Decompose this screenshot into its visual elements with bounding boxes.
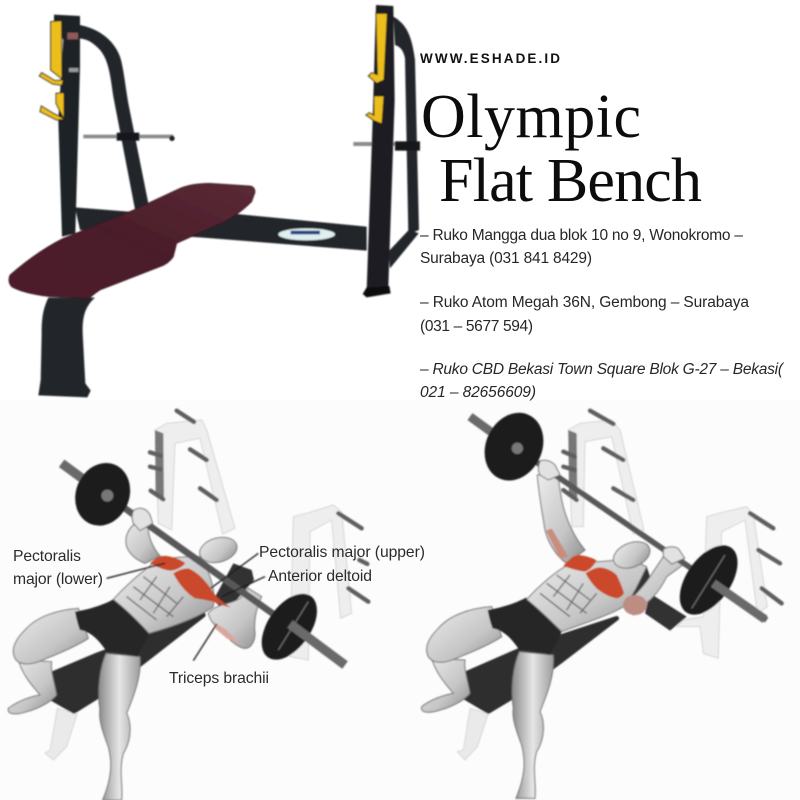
muscle labels: Pectoralis [13, 548, 81, 565]
address block: – Ruko Mangga dua blok 10 no 9, Wonokromo – [420, 227, 743, 244]
rear rack [563, 411, 644, 534]
pectoralis highlight [563, 555, 624, 598]
torso [527, 559, 647, 632]
muscle labels: Pectoralis major (upper) [259, 544, 425, 561]
address block: – Ruko CBD Bekasi Town Square Blok G-27 – Bekasi( [419, 361, 785, 378]
address block: 021 – 82656609) [420, 384, 536, 401]
address block: (031 – 5677 594) [420, 318, 533, 335]
bench pad [455, 567, 687, 760]
rear frame arch right [393, 17, 419, 234]
torso [113, 557, 214, 633]
head [610, 537, 654, 573]
photo: olympic flat bench [9, 5, 420, 397]
deltoid highlight [623, 595, 647, 615]
hand left [132, 508, 153, 531]
barbell [62, 455, 345, 669]
yellow hooks left [39, 21, 64, 120]
pedestal [38, 298, 95, 397]
hand left [538, 460, 560, 480]
muscle labels: Triceps brachii [169, 670, 269, 687]
front rack [290, 505, 368, 660]
yellow hooks right [366, 13, 387, 124]
title line two: Flat Bench [439, 147, 702, 215]
arm upper [126, 522, 160, 563]
crossbar with logo [75, 207, 367, 251]
illustration: bench press, wide grip [421, 403, 782, 798]
muscle labels [13, 544, 425, 687]
biceps highlight [546, 528, 568, 559]
rear frame arch left [80, 25, 148, 209]
muscle labels: major (lower) [13, 571, 103, 588]
callout lines [107, 553, 265, 661]
address block [419, 227, 785, 401]
right upright [367, 5, 395, 290]
muscle labels: Anterior deltoid [268, 568, 372, 585]
barbell [470, 403, 767, 625]
illustration: bench press, muscles labelled [8, 411, 368, 800]
shorts [75, 599, 149, 657]
pectoralis highlight [150, 556, 231, 607]
arm lower [208, 588, 262, 648]
title line one: Olympic [421, 83, 641, 151]
triceps highlight [213, 622, 240, 643]
arm lower [623, 552, 685, 615]
front rack [677, 507, 782, 658]
heading: website: WWW.ESHADE.ID [420, 51, 560, 66]
legs [421, 607, 554, 798]
arm upper [537, 475, 585, 563]
address block: – Ruko Atom Megah 36N, Gembong – Surabaya [420, 294, 749, 311]
upholstered seat [9, 183, 255, 298]
address block: Surabaya (031 841 8429) [420, 250, 592, 267]
legs [8, 608, 140, 800]
rear rack [150, 411, 235, 534]
barbell rest pin left [83, 133, 175, 141]
shorts [488, 598, 562, 655]
left upright [54, 15, 80, 237]
barbell rest pin right [353, 141, 420, 151]
hand right [663, 547, 685, 564]
head [197, 533, 240, 567]
bench pad [42, 563, 254, 760]
